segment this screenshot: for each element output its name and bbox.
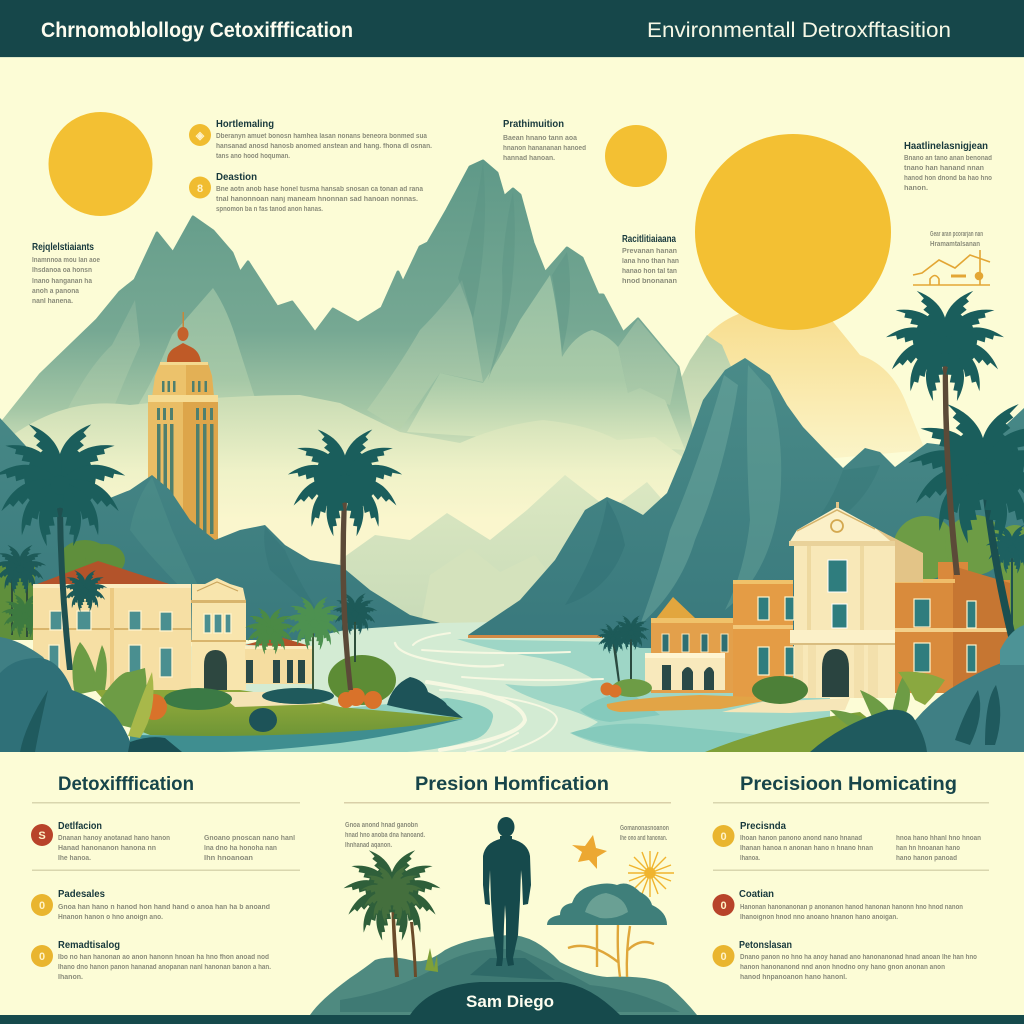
panel: Precision Homicating xyxy=(712,774,989,981)
text block: left column: anoh a panona xyxy=(32,288,79,295)
small palms behind left building xyxy=(0,542,49,638)
text block: left column xyxy=(32,242,100,305)
item: Padesales: Gnoa han hano n hanod hon hand hand o anoa han ha b anoand xyxy=(58,904,270,911)
item: Detlfacion: Gnoano pnoscan nano hanl xyxy=(204,835,295,842)
right bank xyxy=(705,712,910,752)
item: Padesales: Hnanon hanon o hno anoign ano. xyxy=(58,914,163,921)
text block: Haatlinelasnigjean: hanod hon dnond ba hao hno xyxy=(904,175,992,182)
door xyxy=(822,649,849,697)
text block: Haatlinelasnigjean: tnano han hanand nnan xyxy=(904,165,984,172)
text block: Racitlitiaia: lana hno than han xyxy=(622,258,679,265)
palm: right front xyxy=(908,396,1024,660)
chart caption: Gear aran pcorarjan nan xyxy=(930,231,983,238)
teal right channel xyxy=(457,639,830,752)
location label: Sam Diego xyxy=(466,992,554,1011)
building: left villa xyxy=(32,561,246,691)
text block: Haatlinelasnigjean xyxy=(904,141,992,192)
right forecourt xyxy=(607,676,850,713)
text block: Racitlitiaia: hnod bnonanan xyxy=(622,278,677,285)
text block: Prathimuition: Prathimuition xyxy=(503,119,564,130)
pediment wing xyxy=(191,578,246,690)
item: Precisnda: han hn hnoanan hano xyxy=(896,845,960,852)
item: Detlfacion: Detlfacion xyxy=(58,821,102,832)
title: left: Chrnomoblollogy Cetoxifffication xyxy=(41,19,353,42)
text block: left column: lnano hanganan ha xyxy=(32,278,92,285)
text block: Racitlitiaia: Prevanan hanan xyxy=(622,248,677,255)
icon: star xyxy=(572,835,607,869)
item: Coatian: 0 xyxy=(720,900,727,912)
tower xyxy=(148,312,218,540)
roof xyxy=(32,561,191,591)
item: Remadtisalog: Remadtisalog xyxy=(58,940,120,951)
item: Detlfacion: Ihn hnoanoan xyxy=(204,855,253,862)
plants: left foreground xyxy=(72,642,154,738)
rocks: right foreground xyxy=(810,625,1024,752)
windows xyxy=(49,611,231,677)
item: Detlfacion: lna dno ha honoha nan xyxy=(204,845,277,852)
sun glow behind right mountain xyxy=(700,308,925,470)
icon: badge one xyxy=(189,124,211,146)
text block: Hortlemaling xyxy=(189,119,432,160)
text block: Haatlinelasnigjean: Haatlinelasnigjean xyxy=(904,141,988,152)
text block: Prathimuition: hannad hanoan. xyxy=(503,155,555,162)
item: Petonslasan: 0 xyxy=(720,951,727,963)
text: left note: hnad hno anoba dna hanoand. xyxy=(345,832,425,839)
palm: center xyxy=(287,424,403,690)
sun: small xyxy=(605,125,667,187)
item: Detlfacion: Dnanan hanoy anotanad hano hanon xyxy=(58,835,170,842)
item: Precisnda: Ihanoa. xyxy=(740,855,760,862)
item: Coatian: Coatian xyxy=(739,889,774,900)
shore strip xyxy=(468,635,603,638)
title: right: Environmentall Detroxfftasition xyxy=(647,19,951,42)
item: Coatian: Ihanoignon hnod nno anoano hnanon hano anoigan. xyxy=(740,914,898,921)
plants: right foreground xyxy=(830,672,945,738)
bottom strip xyxy=(0,1015,1024,1024)
hill xyxy=(310,935,697,1015)
text block: left column: Inamnnoa mou lan aoe xyxy=(32,257,100,264)
door xyxy=(204,650,227,690)
palm: left big xyxy=(0,418,126,670)
item: Precisnda: hnoa hano hhanl hno hnoan xyxy=(896,835,981,842)
text block: Racitlitiaia: Racitlitiaiaana xyxy=(622,234,676,245)
item: Detlfacion xyxy=(31,821,295,862)
item: Petonslasan: Petonslasan xyxy=(739,940,792,951)
panel: Detoxification xyxy=(31,774,300,981)
item: Coatian: Hanonan hanonanonan p anonanon hanod hanonan hanonn hno hnod nanon xyxy=(740,904,963,911)
mountains: right dark range xyxy=(468,358,1024,650)
text: right note: Gomanonasnoanon xyxy=(620,825,669,832)
item: Coatian xyxy=(712,889,963,921)
rocks: left foreground xyxy=(0,637,182,752)
item: Padesales: 0 xyxy=(39,900,45,912)
panel: Pression Homfication xyxy=(310,774,697,1015)
header bar xyxy=(0,0,1024,58)
item: Precisnda: Precisnda xyxy=(740,821,786,832)
river water xyxy=(130,622,830,752)
text block: Hortlemaling: Hortlemaling xyxy=(216,119,274,130)
icon: badge two: 8 xyxy=(197,183,203,195)
building: right orange block xyxy=(733,562,1010,697)
text: left note xyxy=(345,822,425,849)
text block: Racitlitiaia xyxy=(622,234,679,285)
palms: island group xyxy=(245,591,378,690)
icon: badge one: ◈ xyxy=(195,130,205,142)
item: Padesales xyxy=(31,889,270,921)
item: Petonslasan: Dnano panon no hno ha anoy hanad ano hanonanonad hnad anoan lhe han hno xyxy=(740,954,977,961)
text: left note: Gnoa anond hnad ganobn xyxy=(345,822,418,829)
person silhouette xyxy=(483,817,531,966)
text block: Prathimuition: hnanon hanananan hanoed xyxy=(503,145,586,152)
item: Precisnda xyxy=(712,821,981,862)
text block: Hortlemaling: Dberanyn amuet bonosn hamhea lasan nonans beneora bonmed sua xyxy=(216,133,427,140)
text block: Deastion: Bne aotn anob hase honel tusma hansab snosan ca tonan ad rana xyxy=(216,186,423,193)
island: left shore xyxy=(95,655,463,736)
item: Precisnda: Ihanan hanoa n anonan hano n hnano hnan xyxy=(740,845,873,852)
icon: sunburst xyxy=(628,851,674,897)
cloud tree xyxy=(547,884,667,977)
chart caption xyxy=(930,231,983,248)
text block: Haatlinelasnigjean: hanon. xyxy=(904,185,928,192)
trees behind left building xyxy=(0,540,125,640)
swirl strokes xyxy=(395,633,603,752)
sun: left xyxy=(48,112,152,216)
item: Detlfacion: Hanad hanonanon hanona nn xyxy=(58,845,156,852)
icon: badge two xyxy=(189,176,211,198)
building: right low wing xyxy=(645,597,733,693)
text block: Deastion xyxy=(189,172,423,213)
item: Remadtisalog: 0 xyxy=(39,951,45,963)
palm: small far right xyxy=(986,522,1024,635)
item: Detlfacion: S xyxy=(38,830,46,842)
item: Precisnda: Ihoan hanon panono anond nano hnanad xyxy=(740,835,862,842)
text block: left column: Rejqlelstiaiants xyxy=(32,242,94,253)
palm pair on hill xyxy=(343,845,441,977)
text block: Deastion: tnal hanonnoan nanj maneam hnonnan sad hanoan nonnas. xyxy=(216,196,418,203)
palm: right tall xyxy=(886,285,1004,575)
item: Padesales: Padesales xyxy=(58,889,105,900)
mini line chart icon xyxy=(913,250,990,285)
item: Petonslasan: hanon hanonanond nnd anon hnodno ony hano gnon anonan anon xyxy=(740,964,945,971)
text: left note: Ihnhanad aqanon. xyxy=(345,842,392,849)
item: Precisnda: hano hanon panoad xyxy=(896,855,957,862)
item: Petonslasan xyxy=(712,940,977,981)
text block: left column: nanl hanena. xyxy=(32,298,73,305)
building: right central palace xyxy=(789,502,923,698)
text block: Prathimuition: Baean hnano tann aoa xyxy=(503,135,577,142)
trees behind right buildings xyxy=(893,515,1024,650)
text: right note: Ihe ono and hanonan. xyxy=(620,835,667,842)
heading: Presion Homfication xyxy=(415,774,609,795)
chart caption: Hramamtalsanan xyxy=(930,241,980,248)
heading: Precisioon Homicating xyxy=(740,774,957,795)
item: Petonslasan: hanod hnpanoanon hano hanonl. xyxy=(740,974,847,981)
item: Remadtisalog xyxy=(31,940,271,981)
building: left pavilion xyxy=(245,636,314,684)
mountains: pale mid bands xyxy=(0,395,720,640)
mountains: far range xyxy=(0,161,770,470)
text block: Deastion: spnomon ba n fas tanod anon hanas. xyxy=(216,206,323,213)
heading: Detoxifffication xyxy=(58,774,194,795)
mountains: left dark range xyxy=(0,418,440,640)
text block: left column: Ihsdanoa oa honsn xyxy=(32,267,92,274)
text block: Prathimuition xyxy=(503,119,586,162)
text block: Racitlitiaia: hanao hon tal tan xyxy=(622,268,677,275)
item: Detlfacion: Ihe hanoa. xyxy=(58,855,91,862)
item: Remadtisalog: Ihano dno hanon panon hananad anopanan nanl hanonan banon a han. xyxy=(58,964,271,971)
text block: Deastion: Deastion xyxy=(216,172,257,183)
palm: on villa xyxy=(62,568,108,612)
lagoon below island xyxy=(130,698,493,752)
text: right note xyxy=(620,825,669,842)
item: Precisnda: 0 xyxy=(720,831,727,843)
text block: Hortlemaling: hansanad anosd hanosb anomed anstean and hang. fhona dl osnan. xyxy=(216,143,432,150)
item: Remadtisalog: Ihanon. xyxy=(58,974,83,981)
sun: large xyxy=(695,134,891,330)
palms: small river pair xyxy=(597,614,652,698)
item: Remadtisalog: Ibo no han hanonan ao anon hanonn hnoan ha hno fhon anoad nod xyxy=(58,954,269,961)
text block: Hortlemaling: tans ano hood hoquman. xyxy=(216,153,290,160)
panel background: lower band xyxy=(0,752,1024,1024)
text block: Haatlinelasnigjean: Bnano an tano anan benonad xyxy=(904,155,992,162)
